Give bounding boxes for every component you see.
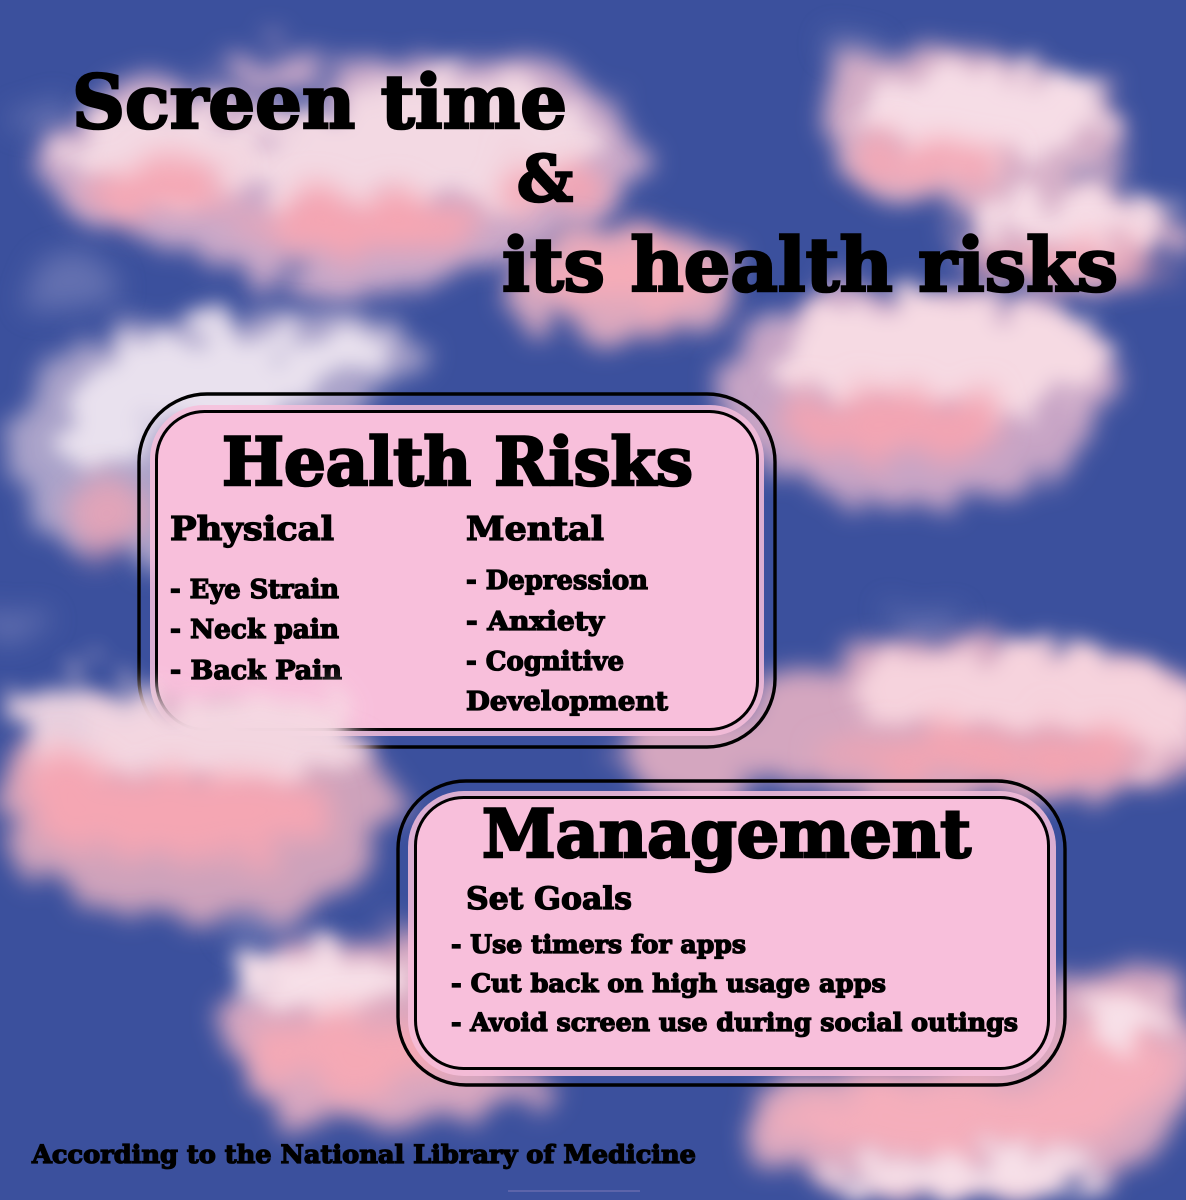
list item: depression: - Depression <box>466 566 648 596</box>
list item: eye strain: - Eye Strain <box>170 575 339 605</box>
column: mental risks <box>466 509 668 717</box>
subheading: set goals: Set Goals <box>466 881 632 917</box>
heading: management: Management <box>482 795 972 873</box>
cloud: top left <box>40 50 635 290</box>
panel frame: management <box>398 781 1065 1085</box>
list item: use timers: - Use timers for apps <box>451 930 746 959</box>
column: physical risks <box>170 509 342 686</box>
list item: avoid screens: - Avoid screen use during social outings <box>451 1008 1018 1037</box>
title <box>72 60 1118 309</box>
list item: anxiety: - Anxiety <box>466 607 605 637</box>
subheading: physical: Physical <box>170 509 334 548</box>
title ampersand: & <box>517 142 573 217</box>
cloud wisps: faint haze <box>0 31 960 938</box>
panel: health risks <box>139 394 775 747</box>
cloud: center right <box>720 283 1110 507</box>
list item: back pain: - Back Pain <box>170 656 342 686</box>
list item: cognitive development <box>466 647 668 717</box>
source note: According to the National Library of Medicine <box>31 1140 696 1169</box>
cloud: bottom centre <box>220 935 550 1125</box>
title line: screen time: Screen time <box>72 60 567 146</box>
list item: cognitive development: - Cognitive <box>466 647 624 677</box>
cloud: middle left <box>10 305 425 560</box>
cloud: bottom right <box>735 970 1186 1195</box>
panel: management <box>398 781 1065 1085</box>
cloud: lower left, over panel corner <box>5 673 395 923</box>
title line: its health risks: its health risks <box>502 223 1118 309</box>
subheading: mental: Mental <box>466 509 604 548</box>
cloud: right middle <box>615 638 1186 802</box>
cloud: middle band <box>515 227 735 343</box>
list item: neck pain: - Neck pain <box>170 615 339 645</box>
heading: health risks: Health Risks <box>222 423 693 501</box>
list item: cognitive development: Development <box>466 687 668 717</box>
cloud: top right <box>825 50 1185 282</box>
panel frame: health risks <box>139 394 775 747</box>
list item: cut back: - Cut back on high usage apps <box>451 969 886 998</box>
